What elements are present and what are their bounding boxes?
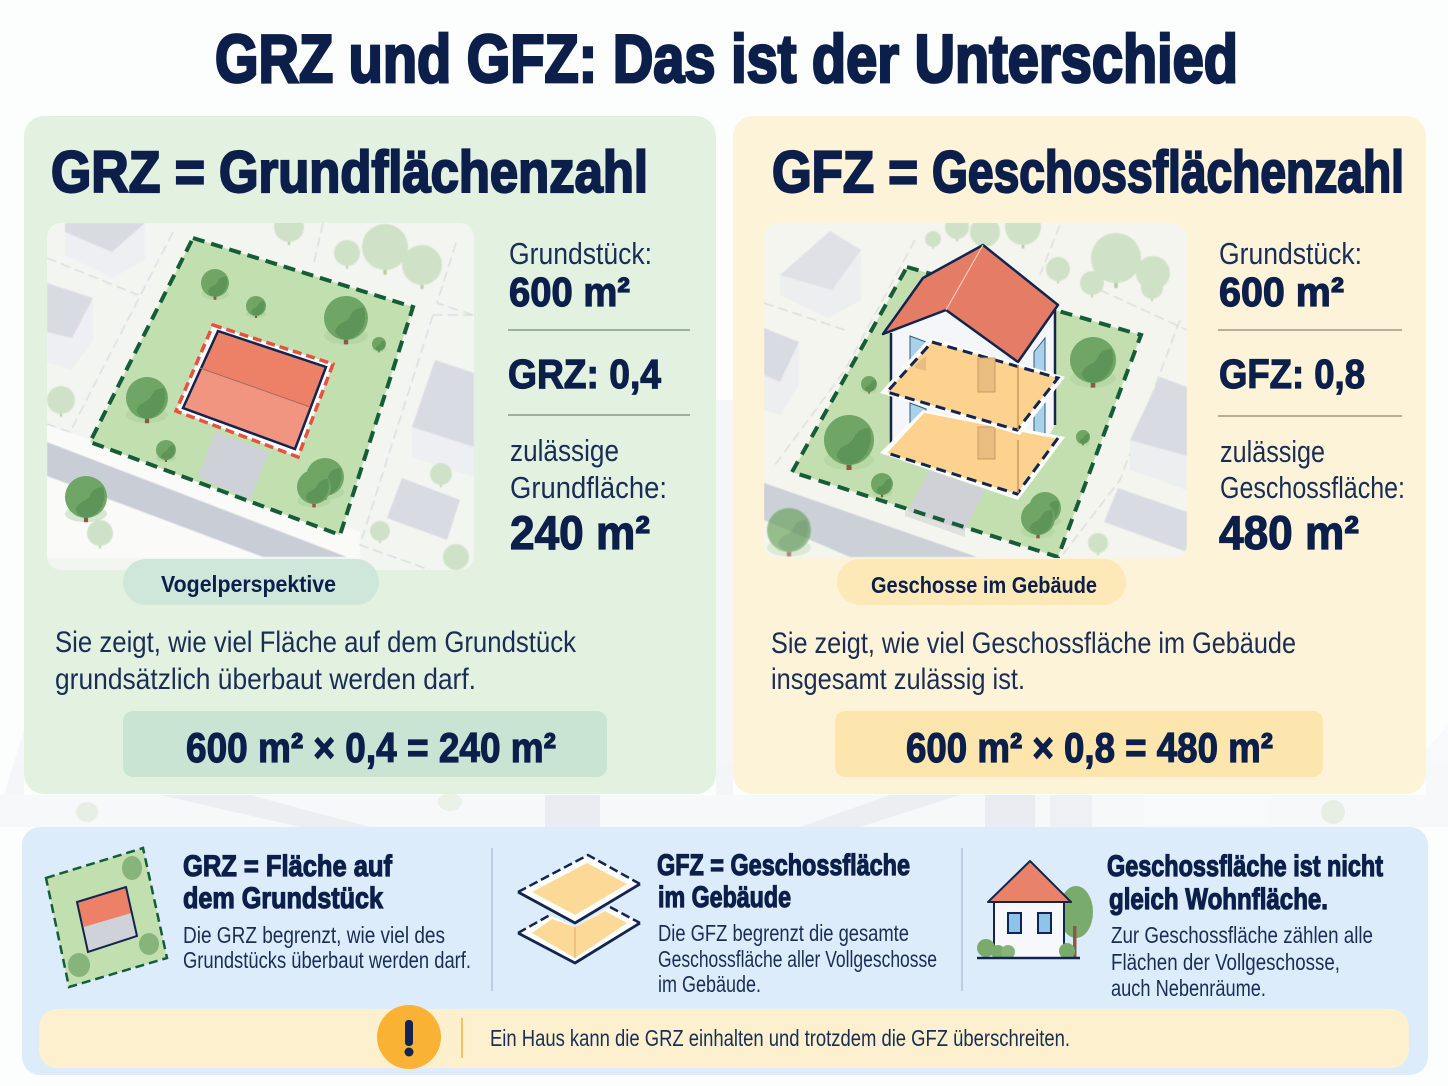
text: Wohnfläche note: auch Nebenräume. (1111, 975, 1266, 1001)
label: Vogelperspektive (123, 559, 379, 605)
formula: GRZ (123, 711, 607, 777)
text: GRZ summary: dem Grundstück (183, 882, 383, 915)
description: GFZ: Sie zeigt, wie viel Geschossfläche im Gebäude (771, 627, 1296, 660)
stats: GFZ: 600 m² (1219, 269, 1344, 315)
house walls (890, 310, 1056, 444)
heading: GRZ: Grundflächenzahl (219, 140, 648, 205)
driveway (198, 432, 269, 500)
lower floor plate (880, 410, 1065, 500)
panel: GRZ (24, 116, 716, 794)
illustration: bird's-eye view of plot (47, 212, 474, 573)
upper floor plate (880, 337, 1065, 435)
text: GFZ summary: Die GFZ begrenzt die gesamte (658, 920, 909, 946)
stats: GRZ: Grundstück: (509, 236, 652, 271)
text: GFZ summary (657, 849, 937, 997)
text: GRZ summary (183, 850, 471, 973)
callout: warning (39, 1005, 1409, 1069)
street (47, 425, 360, 558)
formula: GFZ: 600 m² × 0,8 = 480 m² (906, 724, 1273, 771)
heading: GRZ (51, 140, 648, 205)
text: GRZ summary: Grundstücks überbaut werden darf. (183, 947, 471, 973)
label: Geschosse im Gebäude: Geschosse im Gebäude (871, 572, 1097, 598)
stats: GRZ (508, 236, 690, 559)
text: Wohnfläche note: Zur Geschossfläche zählen alle (1111, 922, 1373, 948)
description: GRZ: Sie zeigt, wie viel Fläche auf dem Grundstück (55, 626, 577, 659)
street (764, 483, 977, 557)
stats: GFZ: GFZ: 0,8 (1219, 351, 1365, 397)
stats: GRZ: GRZ: 0,4 (508, 351, 661, 397)
plot boundary (90, 238, 413, 535)
description: GFZ (771, 627, 1296, 696)
icon: plot with building (46, 848, 167, 987)
text: GFZ summary: im Gebäude. (658, 971, 761, 997)
neighbour houses (764, 231, 1187, 552)
lot lines (764, 225, 1187, 558)
callout: warning: Ein Haus kann die GRZ einhalten und trotzdem die GFZ überschreiten. (490, 1025, 1070, 1051)
stats: GFZ: Geschossfläche: (1220, 470, 1405, 505)
title: GRZ und GFZ: Das ist der Unterschied (215, 21, 1238, 97)
illustration: building with floors (764, 209, 1187, 558)
label: Vogelperspektive: Vogelperspektive (161, 571, 336, 597)
stats: GRZ: 240 m² (510, 506, 650, 559)
description: GRZ (55, 626, 577, 696)
stats: GFZ: 480 m² (1219, 506, 1359, 559)
plot (90, 238, 413, 535)
text: Wohnfläche note (1107, 850, 1383, 1001)
panel: summary (22, 827, 1428, 1075)
trees (65, 269, 386, 522)
driveway (907, 470, 985, 533)
label: Geschosse im Gebäude (837, 559, 1126, 605)
heading: GFZ: GFZ = (772, 140, 918, 205)
description: GRZ: grundsätzlich überbaut werden darf. (55, 663, 476, 696)
plot (792, 267, 1141, 557)
stats: GFZ: zulässige (1220, 434, 1325, 469)
trees (824, 337, 1116, 538)
text: Wohnfläche note: gleich Wohnfläche. (1109, 883, 1328, 916)
stats: GRZ: Grundfläche: (510, 470, 667, 505)
background trees (47, 212, 469, 573)
stats: GRZ: 600 m² (509, 269, 630, 315)
plot boundary (792, 267, 1141, 557)
background trees (767, 209, 1170, 556)
stats: GRZ: zulässige (510, 433, 619, 468)
panel: GFZ (733, 116, 1426, 794)
neighbour houses (47, 223, 474, 540)
text: GRZ summary: Die GRZ begrenzt, wie viel des (183, 922, 445, 948)
icon: exclamation mark (377, 1005, 441, 1069)
heading: GRZ: GRZ = (51, 140, 205, 205)
roof (883, 245, 1058, 362)
text: GRZ summary: GRZ = Fläche auf (183, 850, 393, 883)
text: GFZ summary: Geschossfläche aller Vollgeschosse (658, 946, 937, 972)
heading: GFZ (772, 140, 1404, 205)
text: GFZ summary: GFZ = Geschossfläche (657, 849, 910, 882)
text: Wohnfläche note: Flächen der Vollgeschosse, (1111, 949, 1340, 975)
icon: stacked floors (518, 855, 640, 963)
lot lines (47, 223, 473, 570)
description: GFZ: insgesamt zulässig ist. (771, 663, 1025, 696)
icon: small house (977, 861, 1093, 959)
stats: GFZ: Grundstück: (1219, 236, 1362, 271)
stats: GFZ (1218, 236, 1405, 559)
formula: GFZ (835, 711, 1323, 777)
text: GFZ summary: im Gebäude (658, 881, 791, 914)
formula: GRZ: 600 m² × 0,4 = 240 m² (186, 724, 556, 771)
building footprint (176, 325, 333, 457)
faint map background (0, 400, 1448, 827)
